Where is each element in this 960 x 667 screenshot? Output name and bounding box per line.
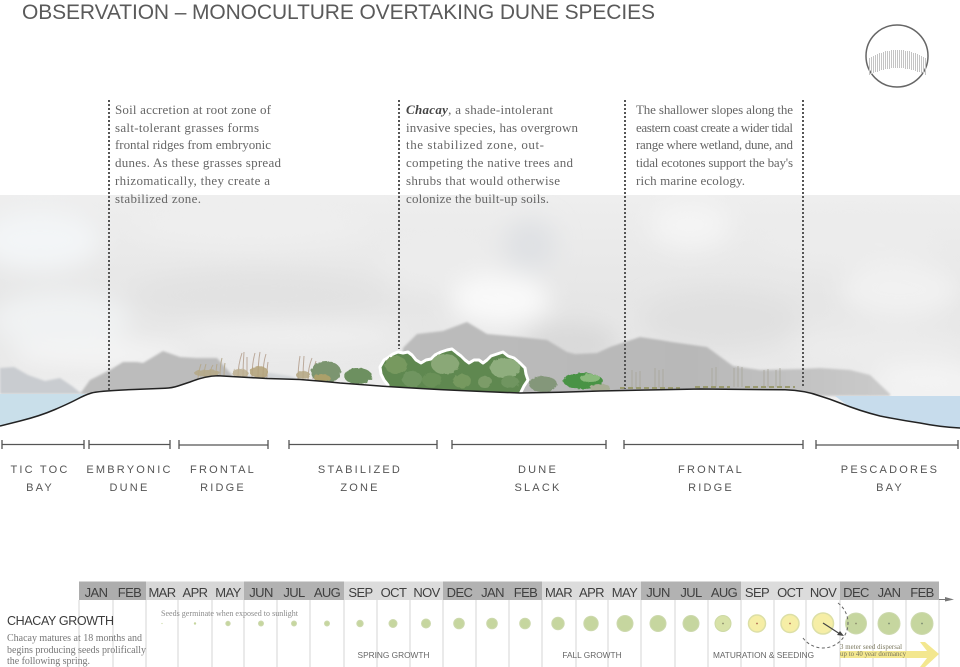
zone labels: DUNE xyxy=(110,482,149,494)
zone labels: STABILIZED xyxy=(318,464,402,476)
text: embryonic dune note: Soil accretion at root zone of xyxy=(115,102,272,117)
month header band: FEB xyxy=(514,585,537,600)
text: embryonic dune note: rhizomatically, they create a xyxy=(115,173,270,188)
month header band: OCT xyxy=(381,585,407,600)
month header band: MAY xyxy=(612,585,638,600)
ground line xyxy=(0,376,960,428)
dune slack shrubs xyxy=(529,373,610,392)
month header band: DEC xyxy=(447,585,473,600)
text: germination note: Seeds germinate when exposed to sunlight xyxy=(161,609,299,618)
text: dispersal note xyxy=(840,644,907,658)
zone labels: EMBRYONIC xyxy=(86,464,173,476)
text: embryonic dune note: frontal ridges from embryonic xyxy=(115,137,271,152)
phase labels: MATURATION & SEEDING xyxy=(713,650,814,660)
native shrubs xyxy=(311,361,372,384)
dotted callout lines xyxy=(109,100,803,390)
text: eastern coast note: range where wetland, dune, and xyxy=(636,137,794,152)
zone labels: RIDGE xyxy=(688,482,734,494)
zone labels: FRONTAL xyxy=(190,464,256,476)
phase labels: FALL GROWTH xyxy=(562,650,622,660)
month header band: MAR xyxy=(148,585,176,600)
month header band: NOV xyxy=(810,585,837,600)
timeline arrow xyxy=(939,597,954,602)
month header band: FEB xyxy=(910,585,934,600)
month header band: MAY xyxy=(215,585,242,600)
month header band: JAN xyxy=(878,585,901,600)
chacay shrubs with white outline xyxy=(380,349,528,394)
seed dispersal radius xyxy=(803,603,848,648)
zone labels: SLACK xyxy=(514,482,562,494)
dormancy arrow xyxy=(840,642,939,667)
month header band: AUG xyxy=(711,585,738,600)
text: embryonic dune note: dunes. As these grasses spread xyxy=(115,155,282,170)
text: eastern coast note: rich marine ecology. xyxy=(636,173,745,188)
text: chacay growth description: Chacay matures at 18 months and xyxy=(7,633,142,644)
growth circles xyxy=(161,612,933,634)
phase labels xyxy=(358,650,814,660)
text: chacay note: invasive species, has overgrown xyxy=(406,120,578,135)
text: chacay growth description xyxy=(7,633,146,667)
icon: location key circle xyxy=(866,25,928,87)
text: eastern coast note: eastern coast create a wider tidal xyxy=(636,120,793,135)
month header band: APR xyxy=(183,585,208,600)
zone labels: PESCADORES xyxy=(841,464,939,476)
text: chacay note: competing the native trees and xyxy=(406,155,574,170)
month header band xyxy=(79,582,939,667)
zone labels: BAY xyxy=(876,482,904,494)
dune grasses, stabilized zone xyxy=(296,356,316,380)
zone labels: DUNE xyxy=(518,464,558,476)
month header band: JUN xyxy=(646,585,670,600)
text: eastern coast note xyxy=(636,102,794,188)
month header band: JUN xyxy=(249,585,273,600)
text: chacay growth description: the following spring. xyxy=(7,656,90,667)
month header band: MAR xyxy=(545,585,572,600)
heading: chacay growth: CHACAY GROWTH xyxy=(7,614,114,628)
distant mountains xyxy=(0,322,890,396)
text: chacay note: shrubs that would otherwise xyxy=(406,173,560,188)
zone labels xyxy=(10,464,939,494)
text: embryonic dune note: stabilized zone. xyxy=(115,191,201,206)
month header band: AUG xyxy=(314,585,341,600)
month header band: JAN xyxy=(85,585,108,600)
faint grasses, frontal ridge right xyxy=(620,366,795,388)
zone labels: TIC TOC xyxy=(10,464,70,476)
text: embryonic dune note: salt-tolerant grasses forms xyxy=(115,120,259,135)
text: chacay note: colonize the built-up soils. xyxy=(406,191,549,206)
month header band: APR xyxy=(579,585,604,600)
text: chacay note xyxy=(406,102,578,206)
text: eastern coast note: The shallower slopes along the xyxy=(636,102,793,117)
month header band: FEB xyxy=(118,585,141,600)
month header band: DEC xyxy=(843,585,869,600)
month header band: NOV xyxy=(413,585,441,600)
text: dispersal note: up to 40 year dormancy xyxy=(840,651,907,658)
dune cross-section ground xyxy=(0,376,960,440)
dune grasses, frontal ridge left xyxy=(194,352,268,378)
text: chacay note: the stabilized zone, out- xyxy=(406,137,544,152)
water: Tic Toc Bay xyxy=(0,394,90,428)
zone labels: RIDGE xyxy=(200,482,246,494)
text: eastern coast note: tidal ecotones support the bay's xyxy=(636,155,793,170)
month header band: JUL xyxy=(283,585,305,600)
month header band: SEP xyxy=(745,585,769,600)
title: OBSERVATION – MONOCULTURE OVERTAKING DUNE SPECIES xyxy=(22,1,655,24)
month header band: JAN xyxy=(481,585,504,600)
month header band: JUL xyxy=(680,585,702,600)
text: embryonic dune note xyxy=(115,102,282,206)
growth timeline xyxy=(7,582,954,667)
text: chacay note: Chacay, a shade-intolerant xyxy=(406,102,553,117)
zone labels: BAY xyxy=(26,482,54,494)
zone brackets xyxy=(2,440,958,449)
month header band: OCT xyxy=(777,585,803,600)
zone labels: FRONTAL xyxy=(678,464,744,476)
phase labels: SPRING GROWTH xyxy=(358,650,429,660)
text: chacay growth description: begins producing seeds prolifically xyxy=(7,645,146,656)
zone labels: ZONE xyxy=(340,482,380,494)
month header band: SEP xyxy=(348,585,373,600)
text: dispersal note: 3 meter seed dispersal xyxy=(840,644,902,651)
sky photo band xyxy=(0,195,960,405)
water: Pescadores Bay xyxy=(835,396,960,430)
